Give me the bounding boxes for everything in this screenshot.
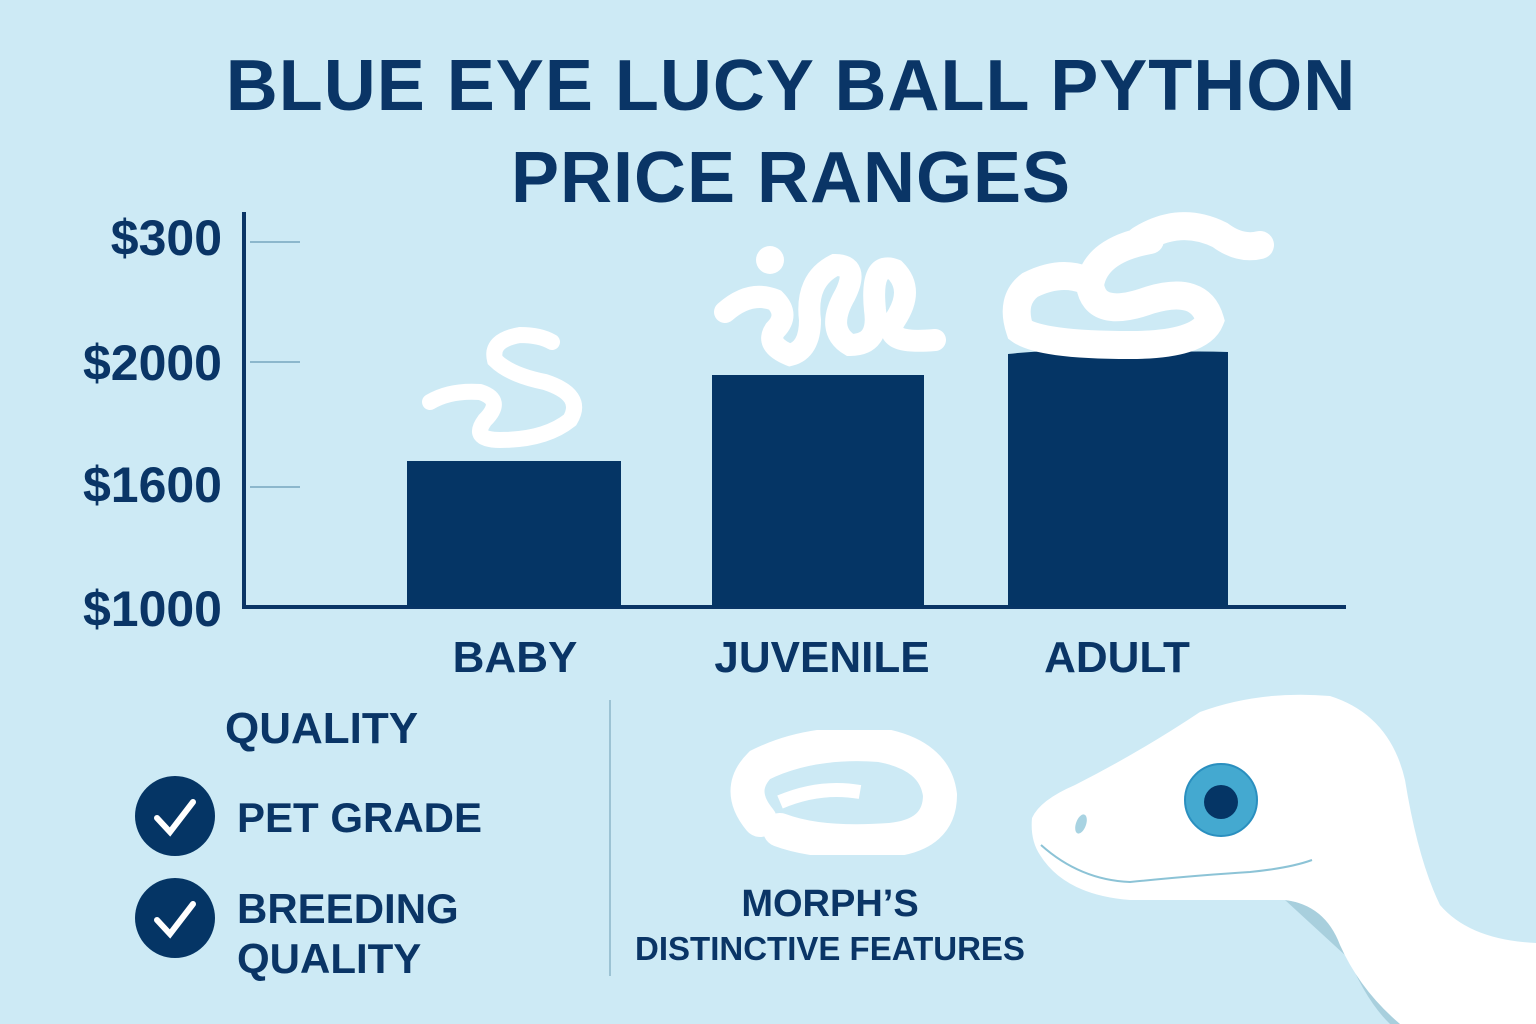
bar: baby bbox=[407, 461, 621, 607]
title: BLUE EYE LUCY BALL PYTHON bbox=[226, 46, 1356, 126]
y axis labels: $2000 bbox=[83, 335, 222, 391]
category labels: BABY bbox=[453, 633, 577, 682]
text: breeding quality: QUALITY bbox=[237, 935, 421, 982]
y axis labels: $1600 bbox=[83, 457, 222, 513]
text: morph features: DISTINCTIVE FEATURES bbox=[635, 930, 1025, 967]
snake: juvenile bbox=[725, 265, 935, 355]
bar: adult bbox=[1008, 351, 1228, 607]
icon: coiled snake bbox=[730, 730, 957, 855]
icon: check pet grade bbox=[135, 776, 215, 856]
title: PRICE RANGES bbox=[511, 138, 1071, 218]
text: morph features: MORPH’S bbox=[741, 883, 919, 925]
bar: juvenile bbox=[712, 375, 924, 607]
snake: baby bbox=[430, 335, 574, 440]
title bbox=[226, 46, 1356, 218]
quality heading: QUALITY bbox=[225, 704, 418, 753]
y axis labels bbox=[83, 210, 222, 637]
snake: adult bbox=[1017, 226, 1260, 345]
icon: blue eye bbox=[1185, 764, 1257, 836]
category labels: JUVENILE bbox=[714, 633, 930, 682]
icon: check breeding bbox=[135, 878, 215, 958]
category labels bbox=[453, 633, 1190, 682]
y axis labels: $1000 bbox=[83, 581, 222, 637]
text: breeding quality: BREEDING bbox=[237, 885, 459, 932]
quality list bbox=[135, 776, 482, 982]
text: pet grade: PET GRADE bbox=[237, 794, 482, 841]
axis lines bbox=[242, 212, 1346, 608]
text: morph features bbox=[635, 883, 1025, 967]
text: breeding quality bbox=[237, 885, 459, 982]
y axis labels: $300 bbox=[111, 210, 222, 266]
category labels: ADULT bbox=[1044, 633, 1190, 682]
